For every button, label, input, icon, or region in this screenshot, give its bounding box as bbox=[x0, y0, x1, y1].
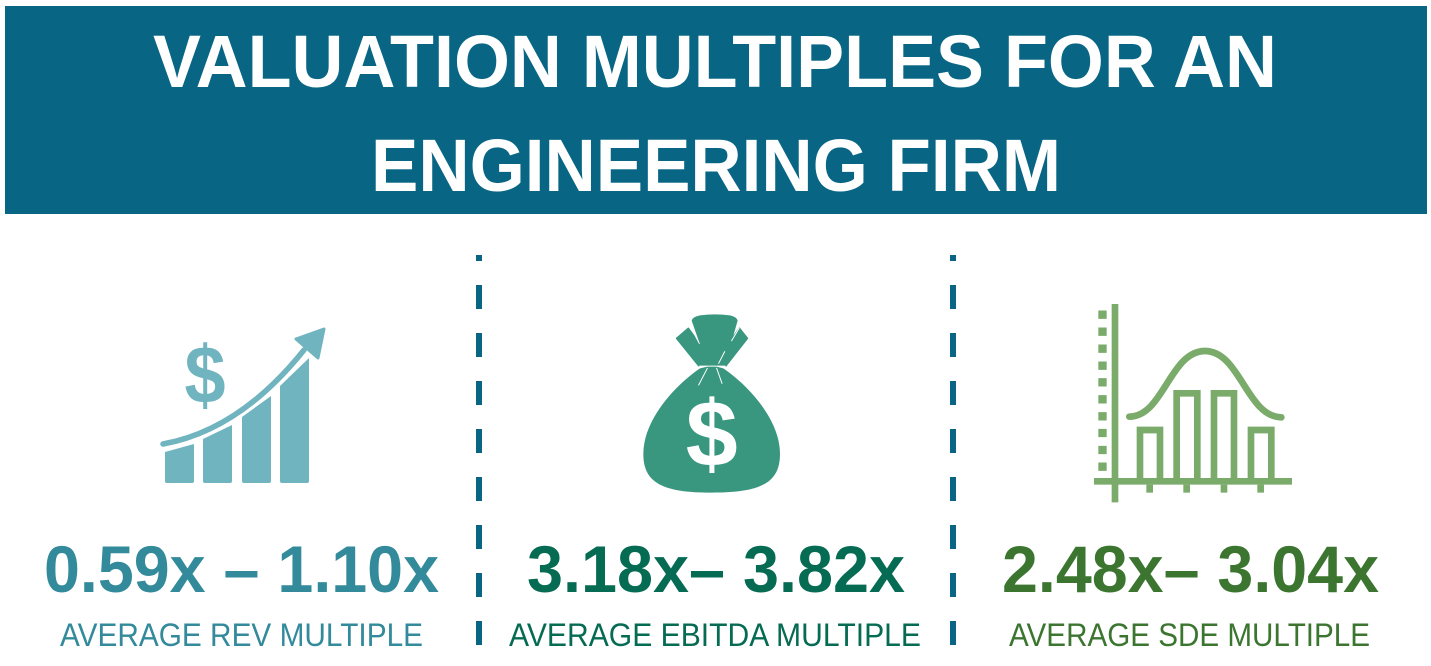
SDE multiple value: 2.48x– 3.04x bbox=[1002, 532, 1379, 606]
revenue multiple value: 0.59x – 1.10x bbox=[44, 532, 439, 606]
revenue multiple label: AVERAGE REV MULTIPLE bbox=[60, 617, 423, 653]
title banner bbox=[5, 6, 1427, 214]
EBITDA multiple label: AVERAGE EBITDA MULTIPLE bbox=[509, 617, 921, 653]
panel: EBITDA multiple bbox=[509, 314, 921, 653]
icon: bell curve histogram bbox=[1094, 304, 1292, 502]
icon: rising bar chart with dollar sign: $ bbox=[184, 328, 226, 421]
SDE multiple label: AVERAGE SDE MULTIPLE bbox=[1009, 617, 1370, 653]
icon: money bag bbox=[643, 314, 780, 493]
icon: money bag: $ bbox=[686, 382, 738, 486]
title line 2: ENGINEERING FIRM bbox=[371, 124, 1061, 207]
panel: SDE multiple bbox=[1002, 304, 1379, 653]
panel: revenue multiple bbox=[44, 328, 439, 653]
icon: rising bar chart with dollar sign bbox=[163, 328, 324, 483]
EBITDA multiple value: 3.18x– 3.82x bbox=[527, 532, 905, 606]
title line 1: VALUATION MULTIPLES FOR AN bbox=[153, 20, 1277, 103]
